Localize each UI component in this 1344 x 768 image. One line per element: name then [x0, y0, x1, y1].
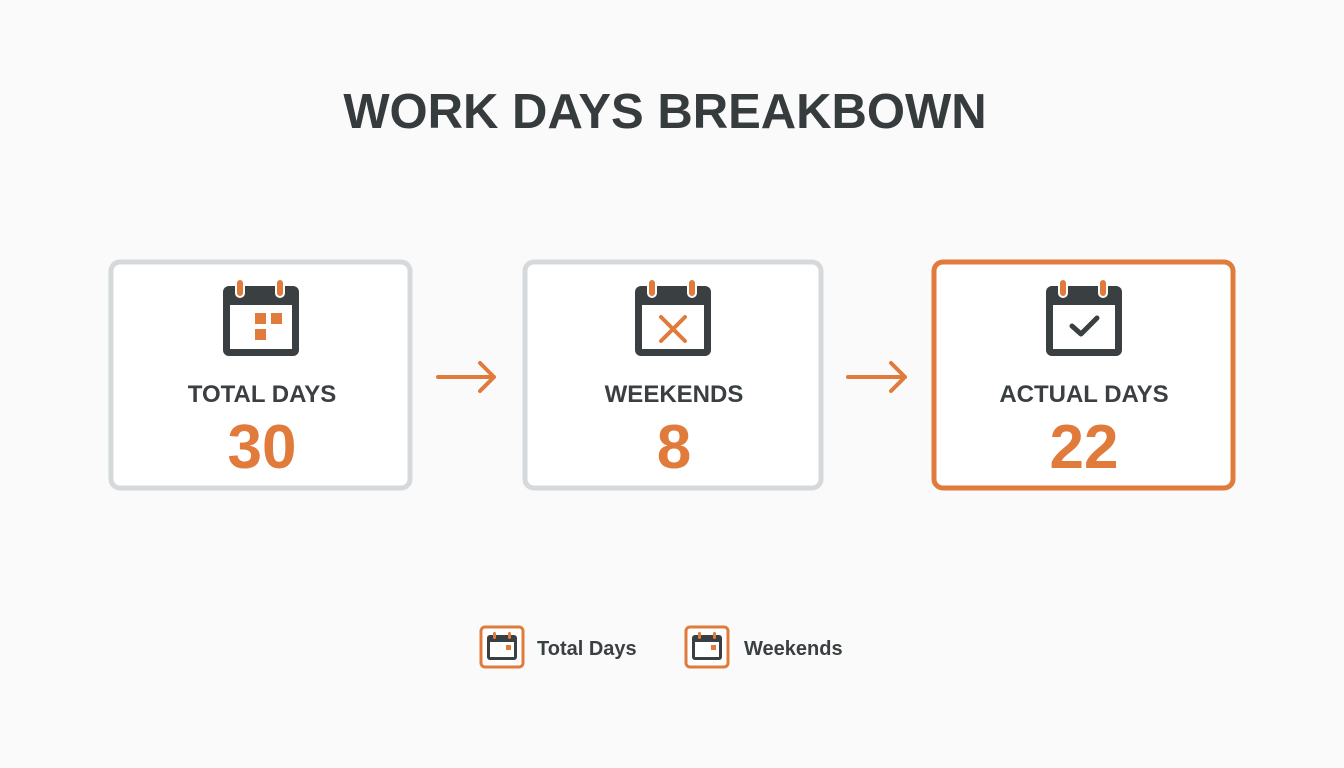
panel: weekends — [525, 262, 821, 488]
label: ACTUAL DAYS — [999, 381, 1169, 408]
icon: calendar with x — [635, 279, 711, 356]
legend item: total days: Total Days — [537, 638, 637, 660]
panel: actual days — [934, 262, 1233, 488]
legend item: total days — [481, 627, 637, 667]
number: 8 — [657, 413, 691, 482]
number: 22 — [1050, 413, 1118, 482]
label: TOTAL DAYS — [188, 381, 336, 408]
number: 30 — [228, 413, 296, 482]
panel: total days — [111, 262, 410, 488]
icon: calendar with squares — [223, 279, 299, 356]
arrow 2 — [848, 363, 905, 391]
icon: calendar with check — [1046, 279, 1122, 356]
title: WORK DAYS BREAKBOWN — [343, 85, 987, 139]
arrow 1 — [438, 363, 494, 391]
legend — [481, 627, 843, 667]
label: WEEKENDS — [605, 381, 743, 408]
legend item: weekends: Weekends — [744, 638, 843, 660]
legend item: weekends — [686, 627, 843, 667]
